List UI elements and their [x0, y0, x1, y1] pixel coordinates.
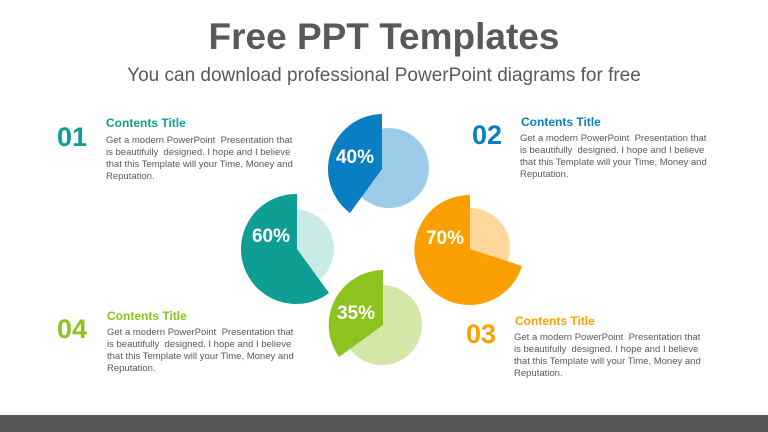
item 02: 02 — [472, 120, 502, 150]
item 03: Reputation. — [514, 368, 563, 379]
item 02: Contents Title — [521, 115, 601, 129]
item 01: Contents Title — [106, 116, 186, 130]
item 02: is beautifully designed. I hope and I believe — [520, 145, 704, 156]
item 03 — [466, 314, 701, 379]
item 04: that this Template will your Time, Money and — [107, 351, 294, 362]
item 01: Reputation. — [106, 171, 155, 182]
item 02 — [472, 115, 707, 180]
item 04: Get a modern PowerPoint Presentation that — [107, 327, 293, 338]
item 04: 04 — [57, 314, 87, 344]
item 03: is beautifully designed. I hope and I believe — [514, 344, 698, 355]
item 03: Get a modern PowerPoint Presentation that — [514, 332, 700, 343]
pie: 60% — [241, 194, 334, 304]
pie: 70%: 70% — [426, 228, 464, 249]
item 03: that this Template will your Time, Money and — [514, 356, 701, 367]
title: Free PPT Templates — [209, 16, 559, 57]
item 01: that this Template will your Time, Money and — [106, 159, 293, 170]
footer bar — [0, 415, 768, 432]
item 03: Contents Title — [515, 314, 595, 328]
item 04: Contents Title — [107, 309, 187, 323]
item 02: Reputation. — [520, 169, 569, 180]
pie: 70% — [414, 195, 522, 305]
item 04 — [57, 309, 294, 374]
item 02: that this Template will your Time, Money and — [520, 157, 707, 168]
item 01 — [57, 116, 293, 182]
item 04: is beautifully designed. I hope and I believe — [107, 339, 291, 350]
pie: 40% — [328, 114, 429, 213]
item 03: 03 — [466, 319, 496, 349]
subtitle: You can download professional PowerPoint diagrams for free — [127, 65, 641, 86]
pie: 60%: 60% — [252, 226, 290, 247]
pie: 40%: 40% — [336, 147, 374, 168]
item 01: Get a modern PowerPoint Presentation that — [106, 135, 292, 146]
item 01: 01 — [57, 122, 87, 152]
pie: 35% — [329, 270, 422, 365]
item 01: is beautifully designed. I hope and I believe — [106, 147, 290, 158]
item 02: Get a modern PowerPoint Presentation that — [520, 133, 706, 144]
item 04: Reputation. — [107, 363, 156, 374]
pie: 35%: 35% — [337, 303, 375, 324]
